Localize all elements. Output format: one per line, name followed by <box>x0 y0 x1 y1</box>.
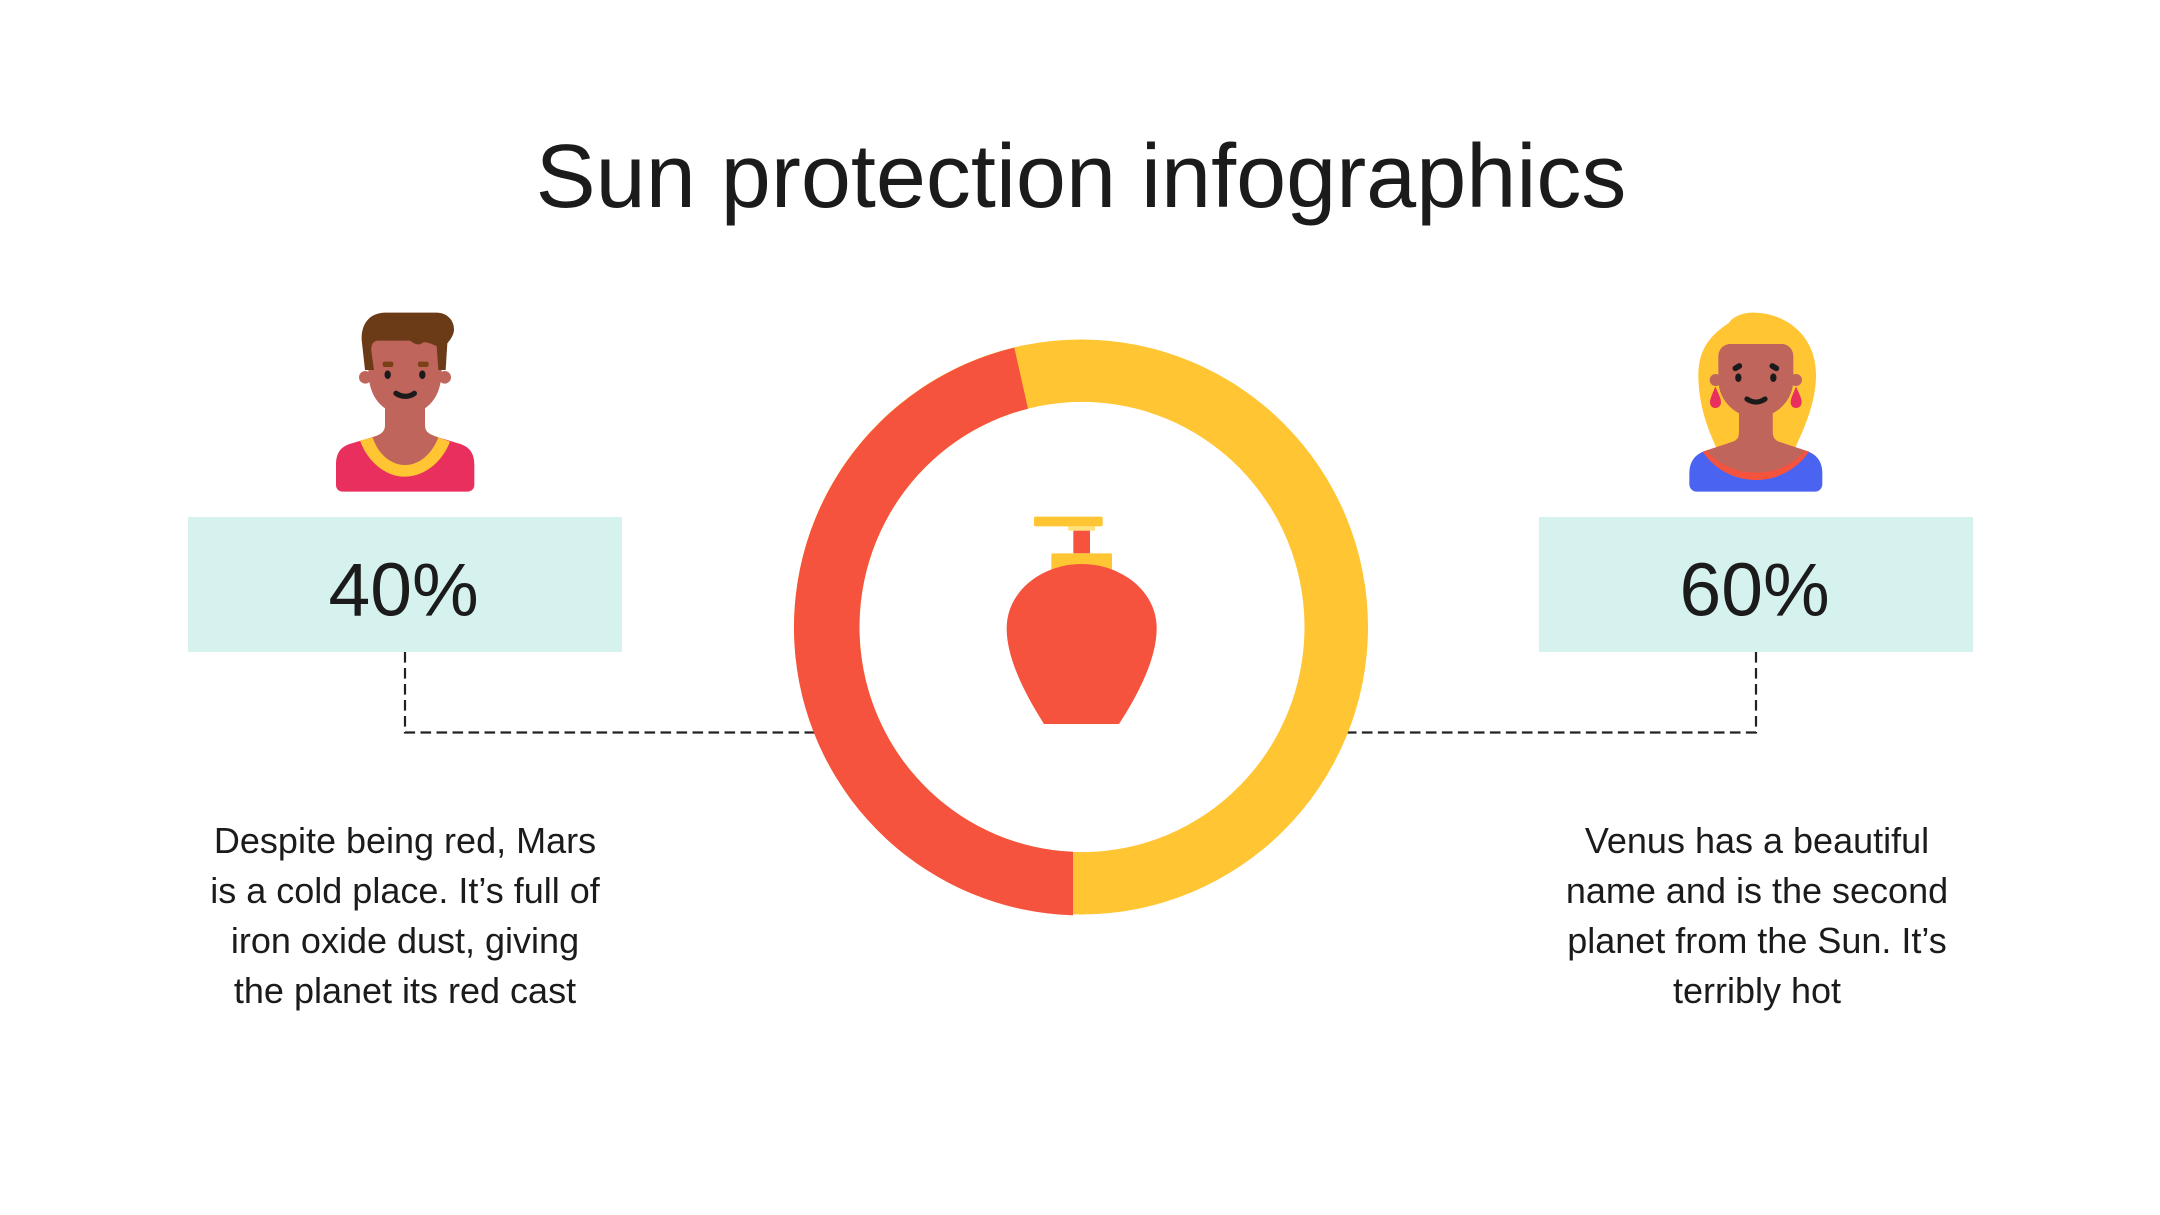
donut segment: 60% yellow <box>794 340 1368 914</box>
right description text: planet from the Sun. It’s <box>1567 920 1947 961</box>
right description text <box>1566 820 1948 1011</box>
left description text: the planet its red cast <box>234 970 576 1011</box>
donut chart <box>794 340 1368 915</box>
left stat box: 40% <box>188 517 622 652</box>
right description text: terribly hot <box>1673 970 1841 1011</box>
left stat box: 40%: 40% <box>329 548 479 632</box>
right description text: name and is the second <box>1566 870 1948 911</box>
right stat box: 60%: 60% <box>1680 548 1830 632</box>
left description text: is a cold place. It’s full of <box>210 870 601 911</box>
donut segment: 40% red <box>794 348 1073 915</box>
right stat box: 60% <box>1539 517 1973 652</box>
right description text: Venus has a beautiful <box>1585 820 1929 861</box>
icon: man avatar <box>336 313 474 492</box>
icon: sunscreen pump bottle <box>1007 517 1157 724</box>
right connector: dashed line <box>1340 652 1756 732</box>
left description text <box>210 820 601 1011</box>
left description text: iron oxide dust, giving <box>231 920 579 961</box>
left description text: Despite being red, Mars <box>214 820 596 861</box>
icon: woman avatar <box>1689 313 1822 492</box>
left connector: dashed line <box>405 652 830 732</box>
title: Sun protection infographics <box>536 127 1626 227</box>
